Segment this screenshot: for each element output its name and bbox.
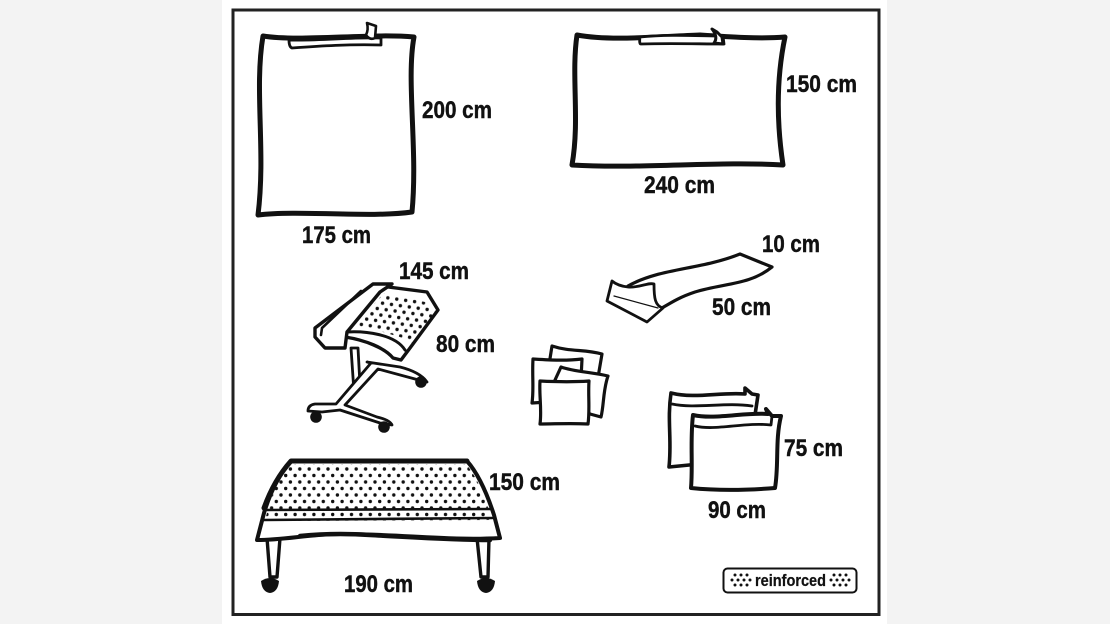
pole [351,348,360,392]
side label: 150 cm [489,469,560,496]
front towel fold [695,416,772,428]
bottom hem emphasis [300,534,490,540]
width label: 175 cm [302,222,371,249]
top label: 145 cm [399,258,469,285]
length label: 50 cm [712,294,771,321]
legend text: reinforced [755,572,826,590]
tape tab [366,23,376,39]
tape tab [712,29,723,44]
table top [257,461,500,540]
width label: 240 cm [644,172,715,199]
edge lines [264,509,492,520]
drape outline [258,36,414,215]
height label: 75 cm [784,435,843,462]
small swabs [532,346,608,424]
drape 175 x 200 cm [258,23,492,249]
width label: 10 cm [762,231,820,258]
left dots [730,574,752,586]
front towel [691,409,781,490]
bassinet cover [308,258,495,433]
height label: 200 cm [422,97,492,124]
top edge emphasis [264,461,467,508]
legs [261,538,495,593]
side label: 80 cm [436,331,495,358]
fold band [315,284,392,348]
mattress fold line [347,332,405,350]
tape [640,35,724,44]
legend: reinforced [724,568,856,592]
width label: 90 cm [708,497,766,524]
dotted reinforced area [355,293,435,345]
towels 90 x 75 cm [669,388,843,524]
back towel [669,388,758,467]
peeled backing [607,281,663,322]
height label: 150 cm [786,71,857,98]
drape 240 x 150 cm [572,29,857,199]
stand [308,348,427,433]
strip body [628,254,772,308]
base [308,362,427,425]
adhesive tape strip [607,231,820,322]
fold line [614,296,658,308]
tape [289,38,381,48]
band inner line [321,291,361,335]
mattress cover [345,285,438,360]
table drape [257,461,560,598]
dotted area [265,464,492,521]
right dots [830,574,850,586]
drape outline [572,35,785,166]
frame [233,10,879,614]
bottom label: 190 cm [344,571,413,598]
